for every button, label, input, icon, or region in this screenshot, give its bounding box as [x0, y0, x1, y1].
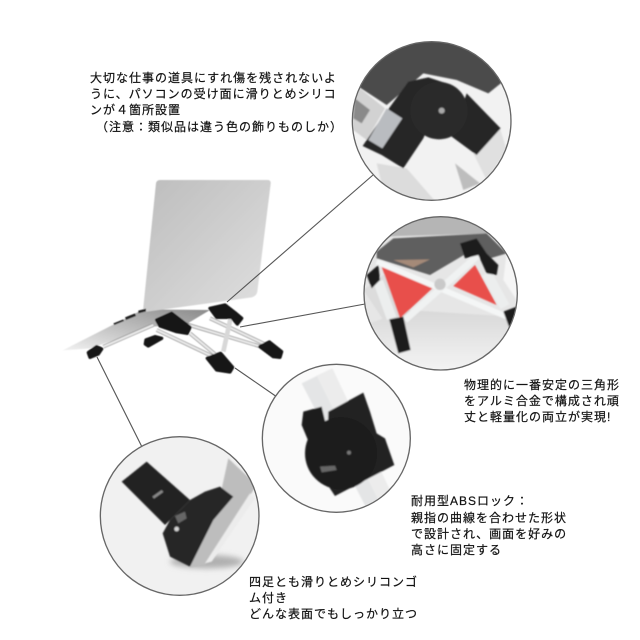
- laptop ports: [113, 309, 146, 325]
- text: anti-slip foot note: ム付き: [249, 591, 288, 605]
- text: triangle structure note: 物理的に一番安定の三角形: [464, 377, 620, 392]
- laptop underside: [360, 42, 501, 106]
- white bars: [377, 255, 507, 320]
- detail circle: anti-slip foot: [100, 437, 259, 595]
- hinge screw: [174, 527, 179, 531]
- text: anti-slip foot note: 四足とも滑りとめシリコンゴ: [249, 574, 418, 589]
- text: anti-slip foot note: どんな表面でもしっかり立つ: [249, 607, 418, 621]
- stand arms: [103, 313, 267, 358]
- aluminium bar: [190, 458, 257, 567]
- table: [377, 309, 510, 370]
- text: silicone pad note: ンが４箇所設置: [90, 102, 181, 117]
- text: ABS lock note: 親指の曲線を合わせた形状: [411, 510, 567, 525]
- text: silicone pad note: （注意：類似品は違う色の飾りものしか）: [96, 120, 343, 134]
- foot flap: [122, 462, 190, 525]
- left background: [350, 88, 385, 140]
- laptop base: [63, 309, 210, 350]
- silicone pad: [368, 108, 402, 148]
- floor shadow: [170, 555, 243, 568]
- laptop lid: [143, 180, 271, 312]
- table and rails: [377, 163, 440, 207]
- laptop underside: [390, 217, 488, 237]
- detail circle: ABS lock: [262, 364, 410, 515]
- text: ABS lock note: 高さに固定する: [411, 543, 502, 557]
- text: ABS lock note: で設計され、画面を好みの: [411, 526, 567, 541]
- red triangles: [382, 267, 433, 318]
- lock body: [327, 393, 394, 496]
- detail circle: triangle structure: [363, 210, 527, 373]
- screw: [439, 108, 445, 114]
- hinge ribs: [175, 512, 187, 523]
- text: triangle structure note: をアルミ合金で構成され頑: [464, 394, 620, 408]
- text: anti-slip foot note: [249, 574, 418, 621]
- aluminium bar: [302, 376, 378, 506]
- hinge body: [363, 77, 501, 168]
- text: ABS lock note: [411, 494, 567, 557]
- thumb lever: [300, 406, 326, 440]
- text: silicone pad note: 大切な仕事の道具にすれ傷を残されないよ: [90, 70, 337, 85]
- black joints: [367, 238, 527, 353]
- text: silicone pad note: うに、パソコンの受け面に滑りとめシリコ: [90, 87, 337, 101]
- pivot: [434, 279, 446, 290]
- detail circle: silicone pad hinge: [350, 40, 513, 207]
- text: silicone pad note: [90, 70, 343, 134]
- foot body: [163, 487, 233, 567]
- laptop on stand: [63, 180, 282, 372]
- stand joints: [88, 305, 282, 372]
- text: ABS lock note: 耐用型ABSロック：: [411, 494, 529, 508]
- text: triangle structure note: [464, 377, 620, 424]
- text: triangle structure note: 丈と軽量化の両立が実現!: [464, 409, 611, 424]
- connector lines: [97, 175, 373, 447]
